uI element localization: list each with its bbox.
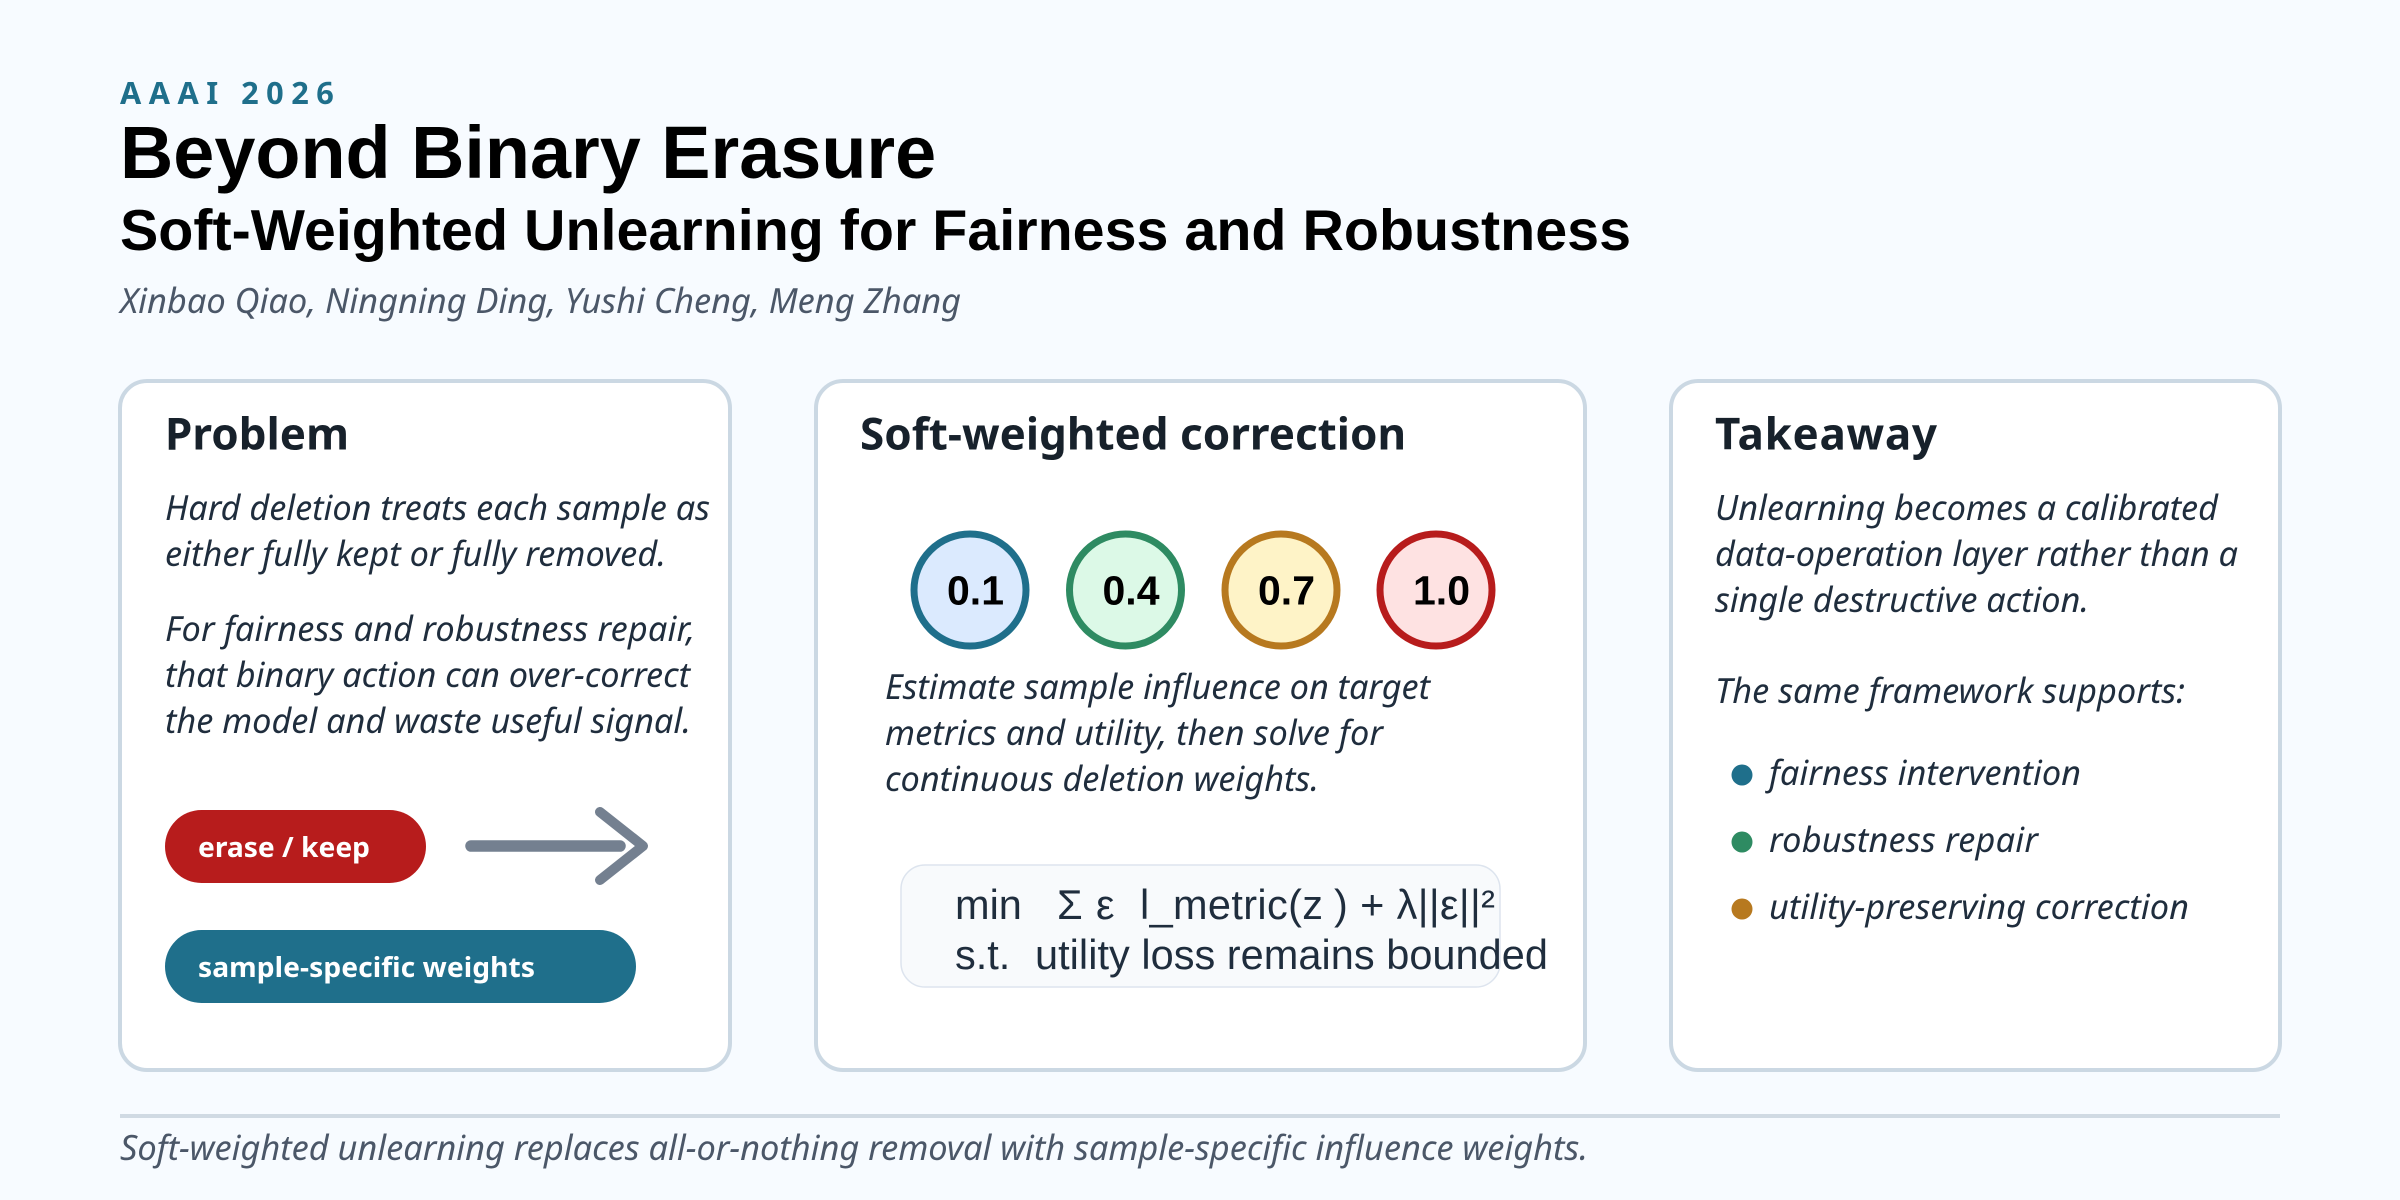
panel: takeaway bbox=[1671, 381, 2280, 1070]
pill: sample-specific weights: sample-specific weights bbox=[198, 948, 535, 986]
circle: 0.4 bbox=[1070, 534, 1182, 646]
text: estimate influence bbox=[885, 663, 1432, 802]
circle: 0.7 bbox=[1225, 534, 1337, 646]
subtitle: Soft-Weighted Unlearning for Fairness and Robustness bbox=[120, 199, 1631, 263]
text: hard deletion: either fully kept or fully removed. bbox=[165, 530, 666, 577]
heading: correction: Soft-weighted correction bbox=[860, 402, 1406, 462]
circle: 1.0: 1.0 bbox=[1413, 568, 1470, 614]
formula text: l_metric(z bbox=[1140, 881, 1323, 928]
text: calibrated layer: data-operation layer rather than a bbox=[1715, 530, 2238, 577]
pill: erase / keep bbox=[165, 810, 426, 883]
footer rule bbox=[120, 1114, 2280, 1118]
text: binary action: For fairness and robustness repair, bbox=[165, 605, 695, 652]
arrow bbox=[471, 812, 643, 880]
text: supports: The same framework supports: bbox=[1715, 667, 2185, 714]
text: hard deletion bbox=[165, 484, 710, 577]
header block bbox=[118, 71, 1631, 324]
formula text bbox=[955, 881, 1548, 978]
bullet: utility: utility-preserving correction bbox=[1769, 883, 2189, 930]
formula text: s.t. bbox=[955, 931, 1010, 978]
text: calibrated layer: Unlearning becomes a calibrated bbox=[1715, 484, 2219, 531]
circle: 0.4: 0.4 bbox=[1102, 568, 1160, 614]
formula text: min bbox=[955, 881, 1022, 928]
text: estimate influence: continuous deletion weights. bbox=[885, 755, 1319, 802]
heading: problem: Problem bbox=[165, 402, 349, 462]
formula text: ) + λ||ε||² bbox=[1334, 881, 1495, 928]
weight circles bbox=[914, 534, 1492, 646]
circle: 0.1: 0.1 bbox=[947, 568, 1004, 614]
bullet: robustness: robustness repair bbox=[1769, 816, 2039, 863]
text: binary action: the model and waste useful signal. bbox=[165, 697, 691, 744]
pill: erase / keep: erase / keep bbox=[198, 828, 370, 866]
panel: soft-weighted correction bbox=[816, 381, 1585, 1070]
text: estimate influence: metrics and utility, then solve for bbox=[885, 709, 1384, 756]
formula text: ε bbox=[1096, 881, 1115, 928]
text: estimate influence: Estimate sample influence on target bbox=[885, 663, 1432, 710]
authors: Xinbao Qiao, Ningning Ding, Yushi Cheng, Meng Zhang bbox=[118, 277, 961, 324]
pill: sample-specific weights bbox=[165, 930, 636, 1003]
conference label: AAAI 2026 bbox=[120, 71, 341, 113]
circle: 0.7: 0.7 bbox=[1258, 568, 1315, 614]
bullet: fairness: fairness intervention bbox=[1765, 749, 2081, 796]
circle: 1.0 bbox=[1380, 534, 1492, 646]
text: hard deletion: Hard deletion treats each sample as bbox=[165, 484, 710, 531]
formula text: Σ bbox=[1057, 881, 1083, 928]
footer note: Soft-weighted unlearning replaces all-or-nothing removal with sample-specific influence weights. bbox=[120, 1124, 1588, 1171]
circle: 0.1 bbox=[914, 534, 1026, 646]
text: calibrated layer bbox=[1715, 484, 2238, 623]
title: Beyond Binary Erasure bbox=[120, 111, 936, 194]
heading: takeaway: Takeaway bbox=[1715, 402, 1938, 462]
text: binary action bbox=[165, 605, 695, 744]
formula box bbox=[901, 865, 1548, 987]
text: binary action: that binary action can over-correct bbox=[165, 651, 692, 698]
panel: problem bbox=[120, 381, 730, 1070]
text: calibrated layer: single destructive action. bbox=[1715, 576, 2089, 623]
formula text: utility loss remains bounded bbox=[1035, 931, 1548, 978]
